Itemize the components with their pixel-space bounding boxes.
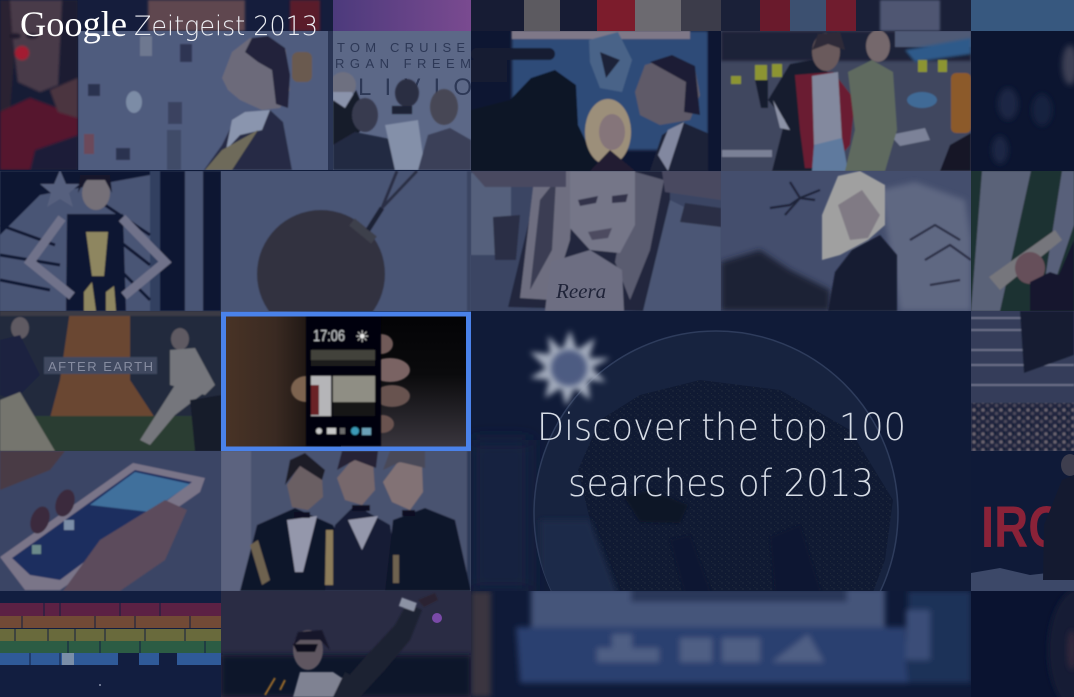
phone body: ☀ [355,327,369,346]
gap strip beside press wall [328,31,333,170]
phone body: 17:06 [313,328,345,345]
highlighted photo tile: HTC One phone [221,311,471,451]
logo: Google Zeitgeist 2013 [20,4,318,44]
photo tile: Argo trio with Oscars [221,451,471,591]
photo tile: blurred PS4 box [471,588,971,697]
photo tile: dark blurred bokeh [971,31,1074,171]
central earth at night panel [476,328,899,591]
headline: discover the top 100 searches [537,406,906,505]
sun flare [530,330,610,406]
photo tile: clown nose portrait [0,0,78,170]
continents with city lights [540,380,893,600]
photo tile: Paris Hilton perfume poster [471,171,721,311]
poster lettering: LIVIO [358,74,472,101]
photo tile: blonde woman with bare trees [721,171,971,311]
photo tile: stadium crowd and screen [971,311,1074,451]
ball [256,210,386,311]
photo tile: Iron Man premiere [971,451,1074,591]
logo: Google Zeitgeist 2013: Google [20,4,127,44]
photo tile: woman with star backdrop [0,165,225,315]
poster crowd [330,72,471,170]
phone body [306,316,381,446]
photo tile: Oliva premiere poster wall [330,0,472,170]
photo tile: Boston marathon street [721,31,971,171]
photo tile: man in suit on press wall [78,31,328,170]
sign lettering: AFTER EARTH [48,359,153,374]
photo tile: top strip cropped faces [78,0,333,31]
logo: Google Zeitgeist 2013: Zeitgeist 2013 [134,11,318,42]
photo tile: Robin Thicke on stage [221,591,471,697]
photo tile: Oscar statuette held in hand [971,171,1074,311]
headline: discover the top 100 searches: searches of 2013 [568,462,874,505]
photo tile: dark portrait corner [971,588,1074,697]
poster signature: Reera [555,279,606,303]
photo tile: top strip crowd clothing [471,0,1074,31]
hand [291,334,410,433]
selection border [224,314,468,449]
poster lettering: RGAN FREEM [335,56,471,71]
chain [368,208,382,230]
poster lettering: TOM CRUISE [337,40,465,55]
photo tile: After Earth premiere [0,305,225,455]
poster lettering [336,43,471,95]
photo tile: Atari Breakout bricks [0,591,221,697]
globe [533,330,899,591]
photo tile: red carpet interview with shark poster [471,31,708,171]
headline: discover the top 100 searches: Discover the top 100 [537,406,906,449]
photo tile: wrecking ball [221,171,471,311]
photo tile: Samsung Galaxy phone in hand [0,445,225,595]
